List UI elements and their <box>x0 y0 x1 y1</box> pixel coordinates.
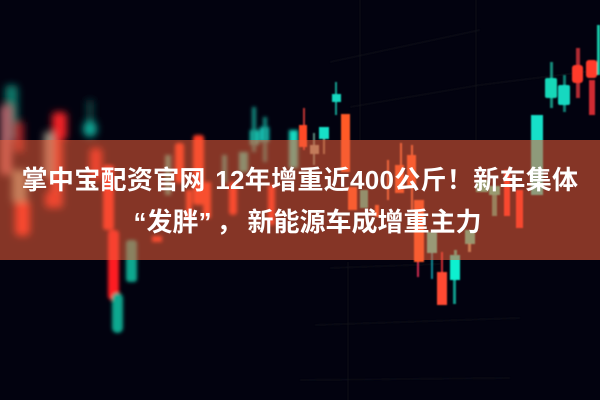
title <box>22 165 578 237</box>
candles: middle-left blurred group <box>103 107 298 333</box>
title: ” <box>198 207 212 237</box>
title: “ <box>133 207 146 237</box>
candles: right group <box>465 25 600 252</box>
candles: far-left blurred group <box>0 85 102 236</box>
title: 发胖 新能源车成增重主力 <box>146 207 482 237</box>
title: ， <box>216 207 243 237</box>
candles: centre sharp group <box>299 82 460 305</box>
translucent title band <box>0 140 600 260</box>
title: 掌中宝配资官网 12年增重近400公斤！新车集体 <box>22 165 578 195</box>
